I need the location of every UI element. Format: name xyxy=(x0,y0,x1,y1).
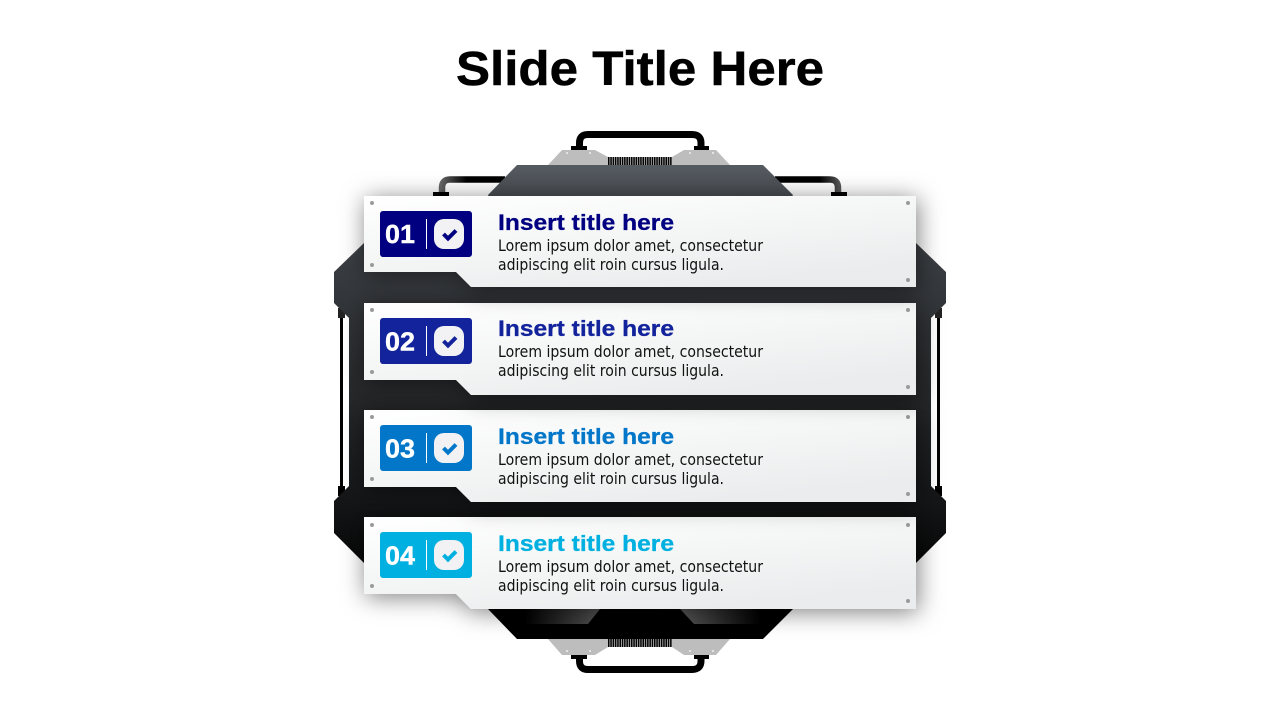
bottom plates xyxy=(548,639,730,655)
card 02 text xyxy=(498,316,763,380)
top hardware: handle, plates and fins xyxy=(548,134,730,165)
badge 04 xyxy=(380,532,472,578)
card 03 text: adipiscing elit roin cursus ligula. xyxy=(498,469,724,488)
badge 02: 02 xyxy=(385,326,415,356)
card 04 text xyxy=(498,531,763,595)
card 04 text: Lorem ipsum dolor amet, consectetur xyxy=(498,557,763,576)
top handle xyxy=(580,134,701,148)
card 02 text: adipiscing elit roin cursus ligula. xyxy=(498,361,724,380)
card 01 text xyxy=(498,210,763,274)
title: Slide Title Here xyxy=(456,43,824,96)
card 04 xyxy=(364,517,916,609)
badge 03 xyxy=(380,425,472,471)
card 01 text: Lorem ipsum dolor amet, consectetur xyxy=(498,236,763,255)
card 01 text: Insert title here xyxy=(498,210,674,235)
badge 03: 03 xyxy=(385,434,415,464)
side handles xyxy=(433,180,847,196)
card 02 text: Insert title here xyxy=(498,316,674,341)
bottom handle xyxy=(580,657,701,670)
card 04 text: adipiscing elit roin cursus ligula. xyxy=(498,576,724,595)
bottom highlights xyxy=(505,609,764,624)
card 04 text: Insert title here xyxy=(498,531,674,556)
card 02 text: Lorem ipsum dolor amet, consectetur xyxy=(498,342,763,361)
card 03 text: Lorem ipsum dolor amet, consectetur xyxy=(498,450,763,469)
badge 01 xyxy=(380,211,472,257)
badge 01: 01 xyxy=(385,219,415,249)
badge 04: 04 xyxy=(385,540,416,570)
card 03 text xyxy=(498,424,763,488)
dark octagonal body xyxy=(334,165,946,639)
top plates xyxy=(548,150,730,165)
bottom fins xyxy=(608,639,672,647)
bottom hardware: plates, fins and handle xyxy=(548,639,730,670)
top fins xyxy=(608,157,672,165)
card 01 xyxy=(364,196,916,287)
card 03 text: Insert title here xyxy=(498,424,674,449)
badge 02 xyxy=(380,318,472,364)
card 02 xyxy=(364,303,916,395)
card 01 text: adipiscing elit roin cursus ligula. xyxy=(498,255,724,274)
card 03 xyxy=(364,410,916,502)
side struts xyxy=(338,308,942,496)
